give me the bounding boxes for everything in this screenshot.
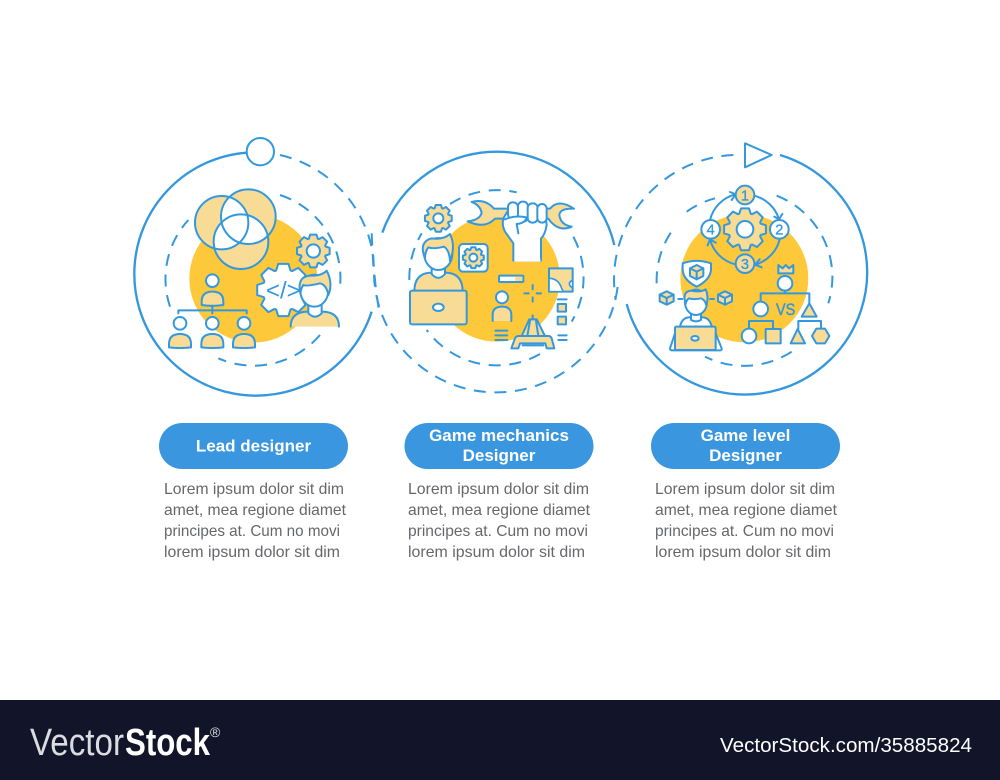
inner dashed ring	[409, 190, 584, 365]
icon: cycle arrows and gear: 4	[707, 223, 715, 239]
outer ring	[134, 138, 380, 396]
label pill: game mechanics designer: Game mechanics	[429, 426, 569, 445]
footer logo	[30, 722, 221, 764]
label pill: game level designer	[651, 423, 840, 469]
text block: lead designer description: principes at. Cum no movi	[164, 523, 340, 540]
label pill: game mechanics designer	[404, 423, 594, 469]
outer ring	[372, 152, 618, 392]
icon: shield with cube	[683, 261, 711, 287]
icon: wrench and fist	[468, 201, 574, 262]
text block: game mechanics description: principes at. Cum no movi	[408, 523, 588, 540]
text block: lead designer description: amet, mea regione diamet	[164, 502, 347, 519]
icon: cycle arrows and gear: 2	[775, 223, 783, 239]
inner dashed ring	[657, 196, 832, 366]
footer image id: VectorStock.com/35885824	[720, 735, 972, 757]
icon: crosshair	[524, 285, 541, 302]
label pill: game mechanics designer: Designer	[463, 446, 536, 465]
text block: game mechanics description	[408, 481, 591, 561]
label pill: game level designer: Game level	[701, 426, 790, 445]
footer logo: ®	[210, 724, 221, 740]
icon: health bar	[499, 276, 523, 282]
icon: cycle arrows and gear: 3	[741, 257, 749, 273]
icon: developer	[291, 271, 339, 327]
panel: game level diagram	[614, 143, 867, 394]
icon: versus tree: VS	[776, 300, 795, 319]
text block: game level description: amet, mea regione diamet	[655, 502, 838, 519]
icon: cycle arrows and gear	[701, 186, 789, 273]
yellow disc	[680, 214, 808, 342]
footer bar	[0, 700, 1000, 780]
icon: game car	[511, 315, 554, 348]
icon: versus tree	[742, 265, 829, 343]
label pill: game level designer: Designer	[709, 446, 782, 465]
panel: game mechanics diagram	[372, 152, 618, 392]
icon: designer with laptop	[410, 234, 467, 324]
icon: map	[549, 268, 573, 292]
text block: game level description: Lorem ipsum dolor sit dim	[655, 481, 835, 498]
icon: code gear: </>	[266, 277, 301, 304]
text block: game mechanics description: Lorem ipsum dolor sit dim	[408, 481, 589, 498]
icon: settings app	[459, 244, 488, 272]
text block: game level description	[655, 481, 838, 561]
icon: gear	[425, 205, 452, 232]
text block: game mechanics description: amet, mea regione diamet	[408, 502, 591, 519]
icon: side cubes	[660, 291, 732, 305]
icon: cycle arrows and gear: 1	[741, 188, 749, 204]
footer logo: Vector	[30, 722, 124, 764]
label pill: lead designer: Lead designer	[196, 436, 312, 456]
icon: menu squares	[558, 299, 567, 340]
text block: lead designer description: lorem ipsum dolor sit dim	[164, 544, 340, 561]
icon: small gear	[297, 235, 330, 267]
panel: lead designer diagram	[134, 138, 380, 396]
icon: org chart	[169, 274, 255, 348]
label pill: lead designer	[159, 423, 348, 469]
outer ring	[614, 143, 867, 394]
text block: game level description: principes at. Cum no movi	[655, 523, 834, 540]
yellow disc	[189, 215, 317, 343]
footer logo: Stock	[125, 722, 211, 764]
text block: game mechanics description: lorem ipsum dolor sit dim	[408, 544, 585, 561]
icon: level designer with laptop	[670, 289, 722, 350]
icon: code gear	[257, 264, 309, 316]
inner dashed ring	[165, 195, 340, 366]
text block: lead designer description	[164, 481, 347, 561]
text block: game level description: lorem ipsum dolor sit dim	[655, 544, 831, 561]
icon: venn diagram	[195, 189, 276, 269]
icon: player	[493, 291, 511, 340]
text block: lead designer description: Lorem ipsum dolor sit dim	[164, 481, 344, 498]
yellow disc	[433, 215, 560, 342]
